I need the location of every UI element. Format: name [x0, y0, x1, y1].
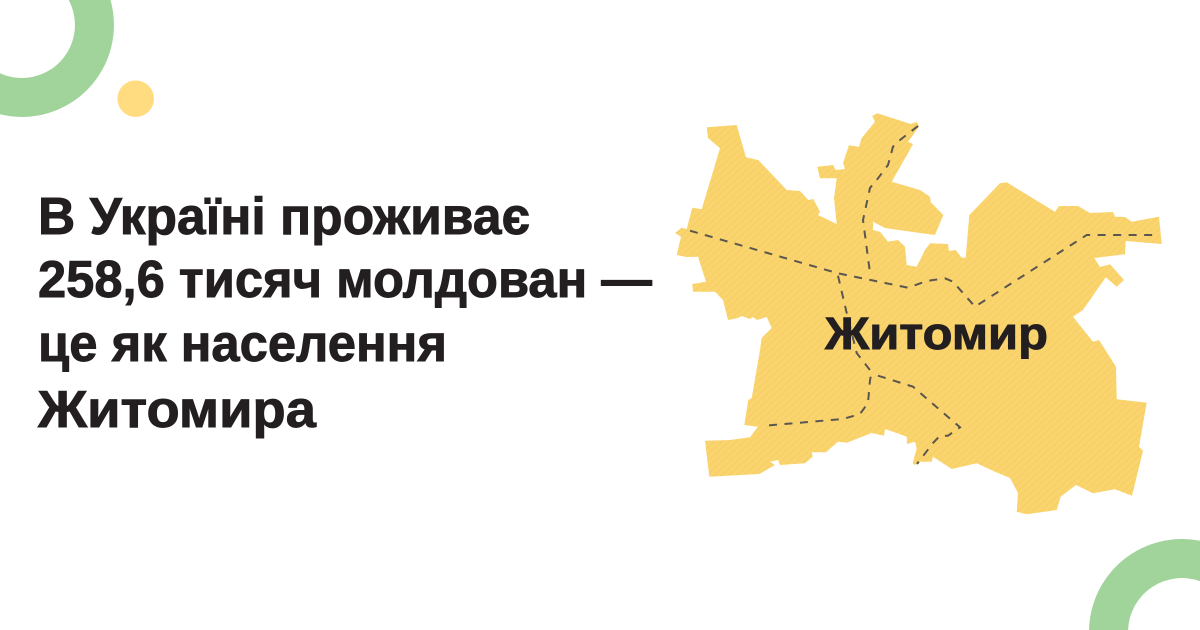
- decorative ring: top left: [0, 0, 114, 117]
- decorative dot: yellow: [117, 80, 154, 117]
- district boundaries: [690, 126, 1153, 464]
- title: В Україні проживає: [38, 188, 530, 246]
- title: це як населення: [38, 315, 447, 373]
- title: 258,6 тисяч молдован —: [38, 251, 652, 309]
- title: [37, 188, 652, 439]
- map label: Житомир: [824, 308, 1048, 359]
- map: Zhytomyr: [675, 113, 1162, 514]
- city outline: [675, 113, 1162, 514]
- decorative ring: bottom right: [1089, 539, 1200, 630]
- title: Житомира: [37, 381, 317, 439]
